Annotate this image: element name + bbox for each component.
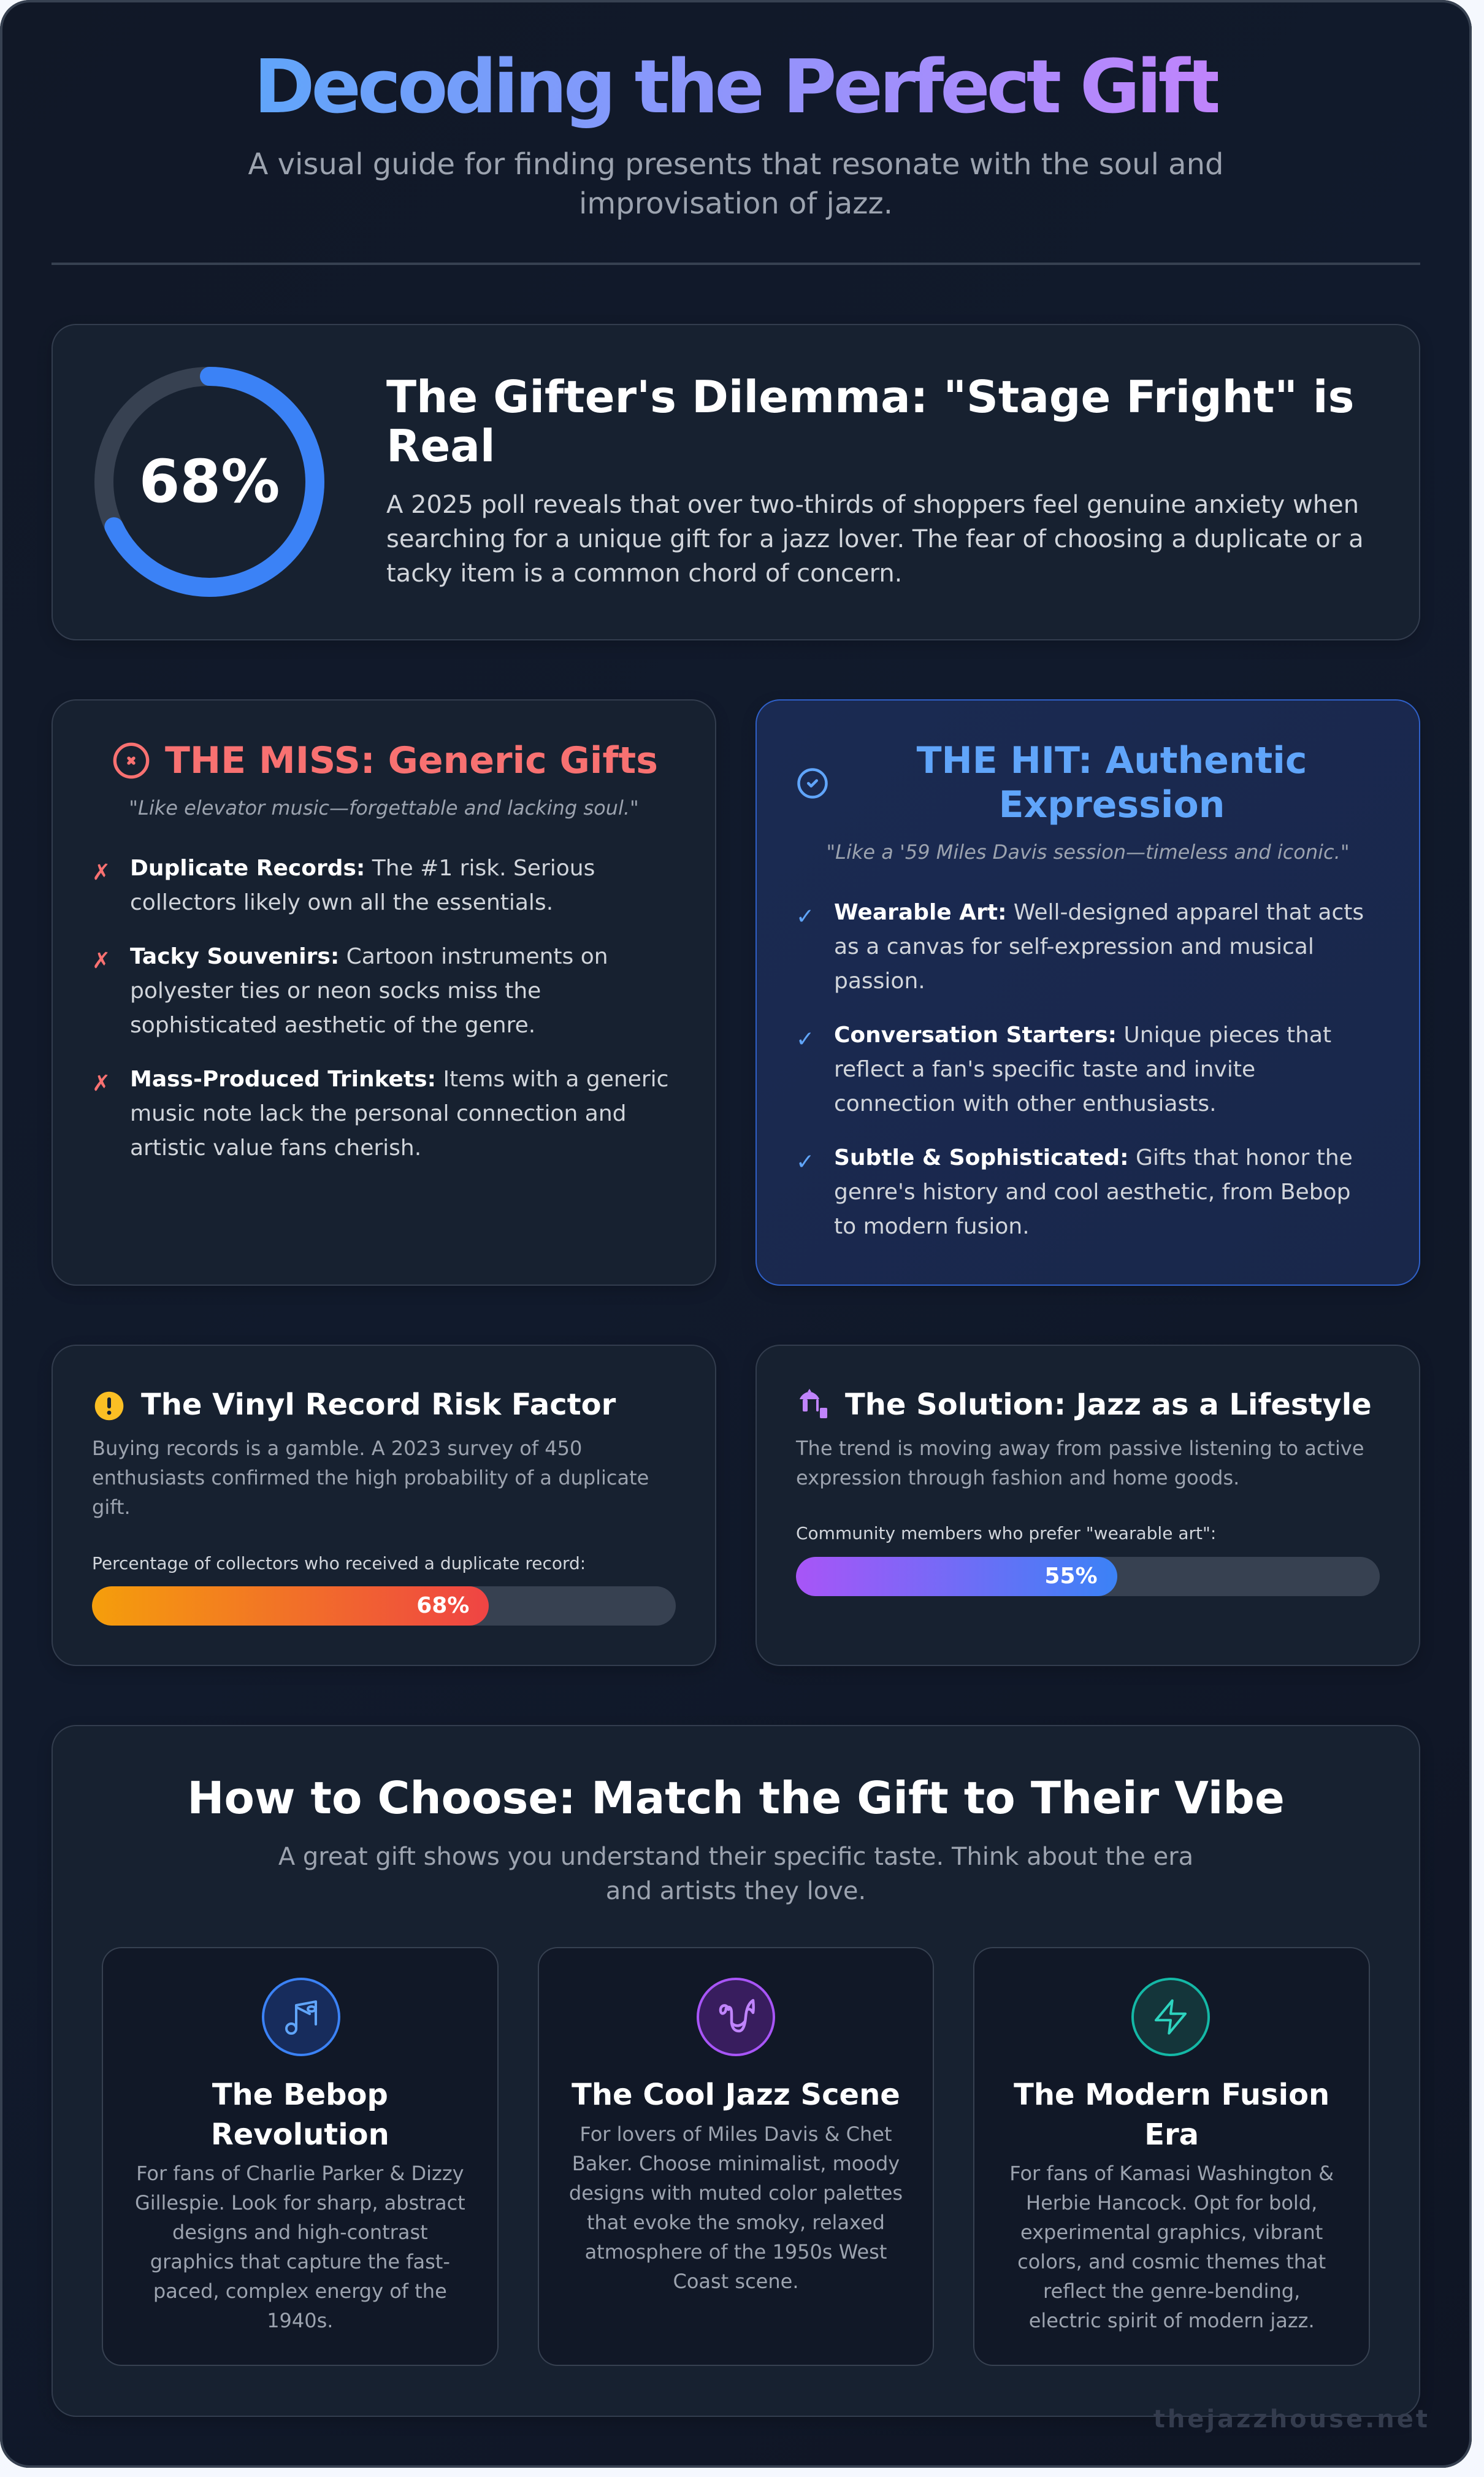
subtitle: A visual guide for finding presents that resonate with the soul and (248, 147, 1223, 182)
vinyl text (92, 1437, 649, 1519)
fusion text: electric spirit of modern jazz. (1029, 2309, 1315, 2332)
solution text (796, 1437, 1364, 1489)
cool jazz text: For lovers of Miles Davis & Chet (579, 2122, 892, 2146)
progress bar: 55% (796, 1557, 1380, 1596)
panel: the gifter's dilemma (52, 324, 1420, 640)
hit item: conversation starters: reflect a fan's specific taste and invite (834, 1057, 1255, 1082)
dilemma heading: The Gifter's Dilemma: "Stage Fright" is (386, 371, 1354, 423)
cool jazz text: atmosphere of the 1950s West (585, 2240, 887, 2264)
panel: vinyl record risk factor (52, 1345, 716, 1666)
fusion heading (1014, 2078, 1329, 2152)
bebop heading: Revolution (211, 2118, 389, 2152)
watermark: thejazzhouse.net (1153, 2405, 1430, 2433)
bebop text: 1940s. (267, 2309, 333, 2332)
section intro: and artists they love. (606, 1877, 866, 1905)
title: Decoding the Perfect Gift (254, 45, 1218, 130)
hit item: conversation starters: Conversation Starters: Unique pieces that (834, 1023, 1331, 1048)
icon: x circle (113, 742, 150, 779)
hit item: conversation starters (796, 1023, 1331, 1116)
hit heading (916, 739, 1307, 826)
subtitle: improvisation of jazz. (579, 186, 893, 221)
progress bar: 68% (92, 1586, 676, 1626)
miss heading: THE MISS: Generic Gifts (165, 739, 658, 782)
cool jazz heading: The Cool Jazz Scene (572, 2078, 900, 2112)
panel: the hit: ✓ (796, 1027, 814, 1052)
dilemma text: searching for a unique gift for a jazz lover. The fear of choosing a duplicate or a (386, 525, 1364, 553)
icon: saxophone (697, 1978, 775, 2056)
vinyl heading: The Vinyl Record Risk Factor (141, 1388, 616, 1422)
panel: jazz as a lifestyle (755, 1345, 1420, 1666)
fusion text (973, 2159, 1370, 2335)
cool jazz text (569, 2122, 903, 2293)
miss item: mass-produced trinkets (92, 1067, 668, 1161)
dilemma text: tacky item is a common chord of concern. (386, 559, 902, 588)
dilemma text (386, 491, 1364, 588)
bebop text: For fans of Charlie Parker & Dizzy (136, 2162, 464, 2185)
fusion text: experimental graphics, vibrant (1020, 2221, 1323, 2244)
panel: the miss: ✗ (92, 1071, 110, 1096)
cool jazz text: Baker. Choose minimalist, moody (572, 2152, 900, 2175)
donut chart: 68%: 68% (139, 447, 280, 516)
panel: the miss (52, 699, 716, 1286)
hit heading: Expression (999, 783, 1225, 826)
progress bar: 68%: 68% (416, 1593, 469, 1618)
hit item: wearable art: passion. (834, 969, 925, 994)
cool jazz text: that evoke the smoky, relaxed (587, 2211, 885, 2234)
donut chart: 68% (94, 367, 324, 597)
miss item: mass-produced trinkets: artistic value fans cherish. (130, 1135, 421, 1161)
miss item: tacky souvenirs: Tacky Souvenirs: Cartoon instruments on (130, 944, 608, 969)
solution text: The trend is moving away from passive listening to active (796, 1437, 1364, 1460)
fusion heading: Era (1144, 2118, 1199, 2152)
fusion heading: The Modern Fusion (1014, 2078, 1329, 2112)
subtitle (248, 147, 1223, 221)
card: cool jazz (538, 1947, 934, 2366)
hit item: subtle and sophisticated: to modern fusion. (834, 1214, 1030, 1239)
panel: the hit: ✓ (796, 904, 814, 929)
miss item: duplicate records: collectors likely own all the essentials. (130, 890, 553, 915)
hit item: subtle and sophisticated: Subtle & Sophisticated: Gifts that honor the (834, 1145, 1353, 1170)
icon: lifestyle (800, 1389, 827, 1418)
panel: the miss: ✗ (92, 948, 110, 974)
fusion text: Herbie Hancock. Opt for bold, (1026, 2191, 1317, 2214)
duplicate label: Percentage of collectors who received a duplicate record: (92, 1553, 586, 1573)
hit quote: "Like a '59 Miles Davis session—timeless and iconic." (826, 840, 1350, 864)
hit item: conversation starters: connection with other enthusiasts. (834, 1091, 1217, 1116)
dilemma heading (386, 371, 1354, 472)
panel: how to choose (52, 1725, 1420, 2417)
bebop text: designs and high-contrast (172, 2221, 428, 2244)
miss item: tacky souvenirs: sophisticated aesthetic of the genre. (130, 1013, 535, 1038)
miss item: duplicate records: Duplicate Records: The #1 risk. Serious (130, 856, 595, 881)
hit heading: THE HIT: Authentic (917, 739, 1307, 782)
bebop heading: The Bebop (212, 2078, 388, 2112)
panel: the hit: ✓ (796, 1150, 814, 1175)
cool jazz text: Coast scene. (673, 2270, 798, 2293)
fusion text: reflect the genre-bending, (1043, 2279, 1300, 2303)
icon: check circle (797, 768, 828, 799)
hit item: wearable art (796, 900, 1364, 994)
card: bebop (102, 1947, 499, 2366)
hit item: subtle and sophisticated: genre's history and cool aesthetic, from Bebop (834, 1180, 1350, 1205)
hit item: subtle and sophisticated (796, 1145, 1353, 1239)
solution heading: The Solution: Jazz as a Lifestyle (845, 1388, 1372, 1422)
section intro: A great gift shows you understand their specific taste. Think about the era (278, 1843, 1193, 1871)
progress bar: 55%: 55% (1044, 1564, 1098, 1589)
card: modern fusion (973, 1947, 1370, 2366)
hit item: wearable art: Wearable Art: Well-designed apparel that acts (834, 900, 1364, 925)
vinyl text: Buying records is a gamble. A 2023 survey of 450 (92, 1437, 582, 1460)
miss item: duplicate records (92, 856, 595, 915)
dilemma heading: Real (386, 420, 495, 472)
bebop text: graphics that capture the fast- (150, 2250, 450, 2273)
solution text: expression through fashion and home goods. (796, 1466, 1239, 1489)
icon: music note (262, 1978, 340, 2056)
vinyl text: enthusiasts confirmed the high probability of a duplicate (92, 1466, 649, 1489)
fusion text: colors, and cosmic themes that (1017, 2250, 1326, 2273)
section heading: How to Choose: Match the Gift to Their Vibe (187, 1772, 1285, 1824)
miss quote: "Like elevator music—forgettable and lacking soul." (129, 796, 639, 820)
dilemma text: A 2025 poll reveals that over two-thirds of shoppers feel genuine anxiety when (386, 491, 1359, 519)
bebop heading (211, 2078, 389, 2152)
miss item: mass-produced trinkets: Mass-Produced Trinkets: Items with a generic (130, 1067, 668, 1092)
bebop text (135, 2162, 465, 2332)
bebop text: Gillespie. Look for sharp, abstract (135, 2191, 465, 2214)
icon: lightning bolt (1131, 1978, 1210, 2056)
section intro (278, 1843, 1193, 1905)
miss item: mass-produced trinkets: music note lack the personal connection and (130, 1101, 627, 1126)
panel: the miss: ✗ (92, 860, 110, 885)
wearable art label: Community members who prefer "wearable art": (796, 1523, 1216, 1543)
cool jazz text: designs with muted color palettes (569, 2181, 903, 2205)
bebop text: paced, complex energy of the (153, 2279, 447, 2303)
fusion text: For fans of Kamasi Washington & (1009, 2162, 1334, 2185)
icon: warning (94, 1391, 124, 1421)
miss item: tacky souvenirs (92, 944, 608, 1038)
hit item: wearable art: as a canvas for self-expression and musical (834, 934, 1314, 959)
vinyl text: gift. (92, 1496, 131, 1519)
panel: the hit (755, 699, 1420, 1286)
miss item: tacky souvenirs: polyester ties or neon socks miss the (130, 978, 541, 1004)
